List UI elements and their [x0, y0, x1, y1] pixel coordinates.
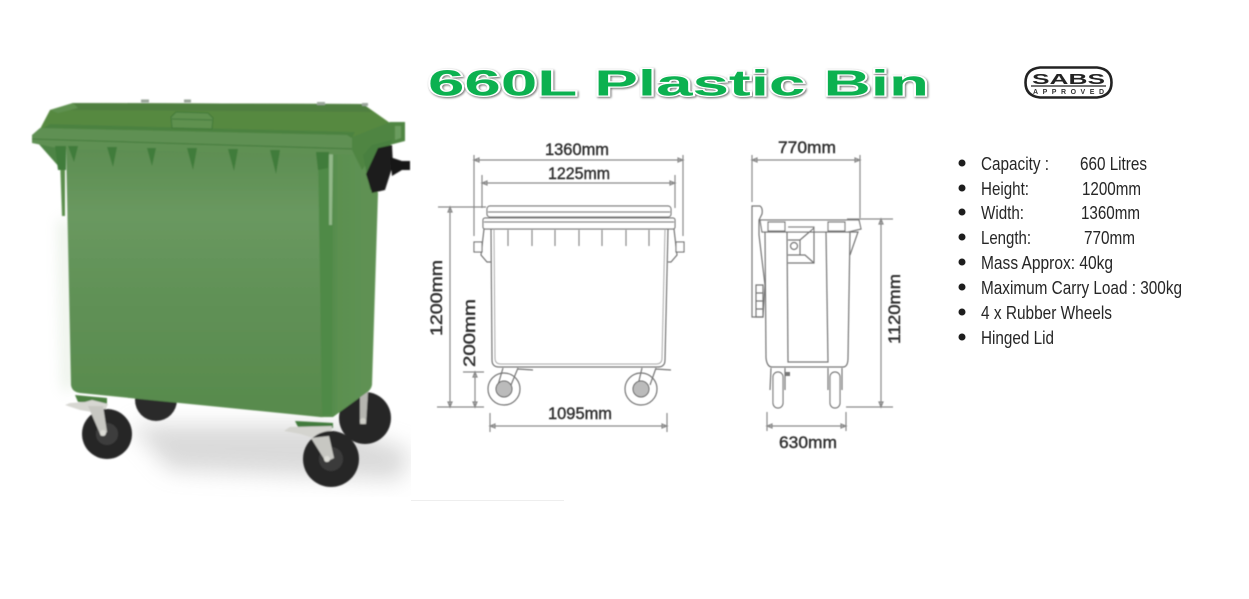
dimension lines: side — [752, 155, 893, 431]
dimension labels: side — [778, 138, 904, 452]
spec text: Hinged Lid — [981, 328, 1054, 348]
faint photo edge — [411, 500, 564, 502]
dimension lines: front — [437, 155, 683, 432]
dimension labels: front: 1360mm — [545, 140, 609, 159]
dimension labels: front: 200mm — [460, 299, 479, 367]
spec text: 1200mm — [1082, 179, 1141, 199]
side elevation drawing — [752, 138, 904, 452]
dimension labels: side: 1120mm — [885, 274, 904, 344]
wheels: side — [770, 368, 842, 408]
spec text — [981, 154, 1182, 348]
spec text: Length: — [981, 228, 1031, 248]
lid handle — [171, 112, 213, 129]
back wheels — [134, 391, 392, 445]
wheels: front — [488, 368, 671, 405]
dimension labels: side: 630mm — [779, 433, 837, 452]
bottom-right fork and plate — [295, 421, 333, 428]
rim — [32, 128, 363, 155]
panel: product photo of green bin — [32, 100, 410, 487]
spec text: 4 x Rubber Wheels — [981, 303, 1112, 323]
ribs — [55, 146, 329, 174]
dimension labels: front — [427, 140, 612, 423]
spec text: Mass Approx: 40kg — [981, 253, 1113, 273]
dimension labels: front: 1200mm — [427, 260, 446, 336]
spec text: Capacity : — [981, 154, 1049, 174]
icon: SABS approved badge: APPROVED — [1033, 89, 1104, 96]
wheel front right — [303, 431, 359, 487]
body front face — [66, 146, 333, 417]
hinge pins — [141, 100, 368, 106]
spec text: Height: — [981, 179, 1029, 199]
spec text: 660 Litres — [1080, 154, 1147, 174]
title: 660L Plastic Bin — [428, 62, 929, 104]
spec text: 1360mm — [1081, 203, 1140, 223]
floor shadow — [130, 425, 410, 480]
dimension labels: front: 1225mm — [548, 164, 610, 183]
dimension labels: side: 770mm — [778, 138, 836, 157]
wheel front left — [82, 409, 132, 459]
spec text: Maximum Carry Load : 300kg — [981, 278, 1182, 298]
bin outline: front — [474, 206, 684, 367]
spec text: 770mm — [1084, 228, 1135, 248]
lid — [40, 103, 390, 138]
corner highlight — [318, 150, 333, 416]
bottom-left fork and plate — [75, 395, 107, 404]
dimension labels: front: 1095mm — [548, 404, 612, 423]
bin outline: side — [752, 206, 861, 367]
bin body and wheels — [32, 100, 410, 487]
left strip — [60, 160, 65, 216]
spec text: Width: — [981, 203, 1024, 223]
bullets — [958, 160, 966, 340]
front elevation drawing — [427, 140, 684, 432]
body side face — [322, 150, 378, 417]
hinge bracket — [352, 122, 405, 170]
black lock and knob — [366, 145, 393, 193]
specifications list — [958, 154, 1182, 348]
icon: SABS approved badge: SABS — [1032, 71, 1105, 88]
icon: SABS approved badge — [1026, 68, 1112, 98]
